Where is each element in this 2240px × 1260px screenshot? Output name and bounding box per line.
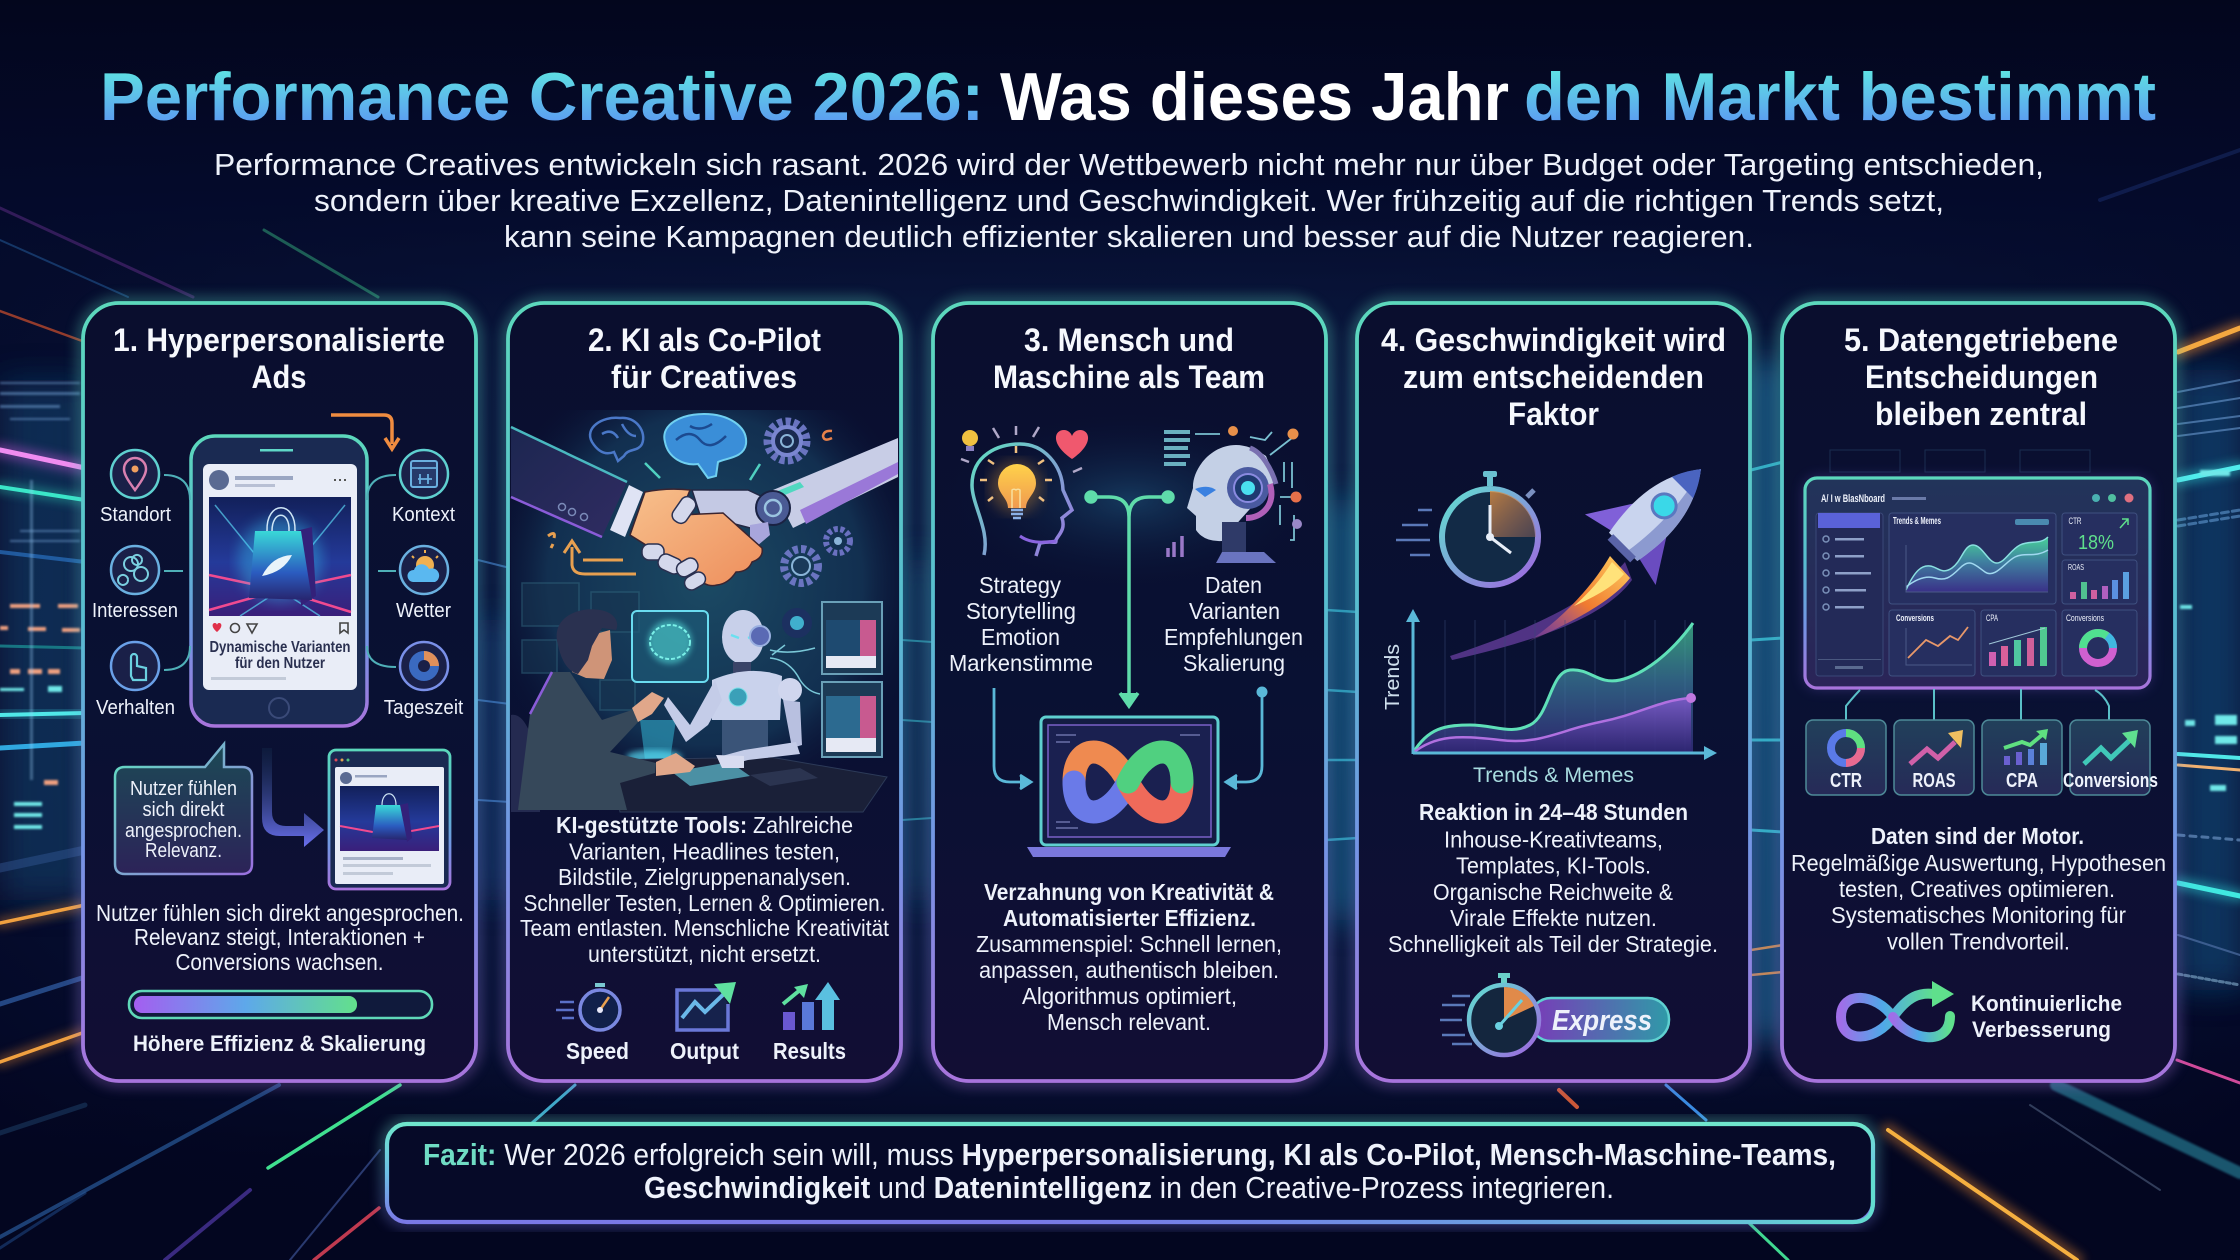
callout: fazit: Geschwindigkeit und Datenintelligenz in den Creative-Prozess integrieren. — [644, 1171, 1614, 1205]
panel: ki als co-pilot — [508, 303, 901, 1081]
list: human strengths — [949, 572, 1093, 676]
panel: geschwindigkeit — [1357, 303, 1750, 1081]
body text 3: Verzahnung von Kreativität & — [984, 879, 1274, 905]
metric: cpa: CPA — [2006, 770, 2038, 792]
body text 1: Relevanz steigt, Interaktionen + — [134, 924, 425, 950]
heading 5 — [1844, 322, 2118, 432]
speech bubble: sich direkt — [142, 799, 225, 821]
body text 4: Organische Reichweite & — [1433, 879, 1673, 905]
phone mockup: für den Nutzer — [235, 655, 325, 672]
speech bubble: angesprochen. — [125, 820, 242, 842]
heading 4 — [1381, 322, 1726, 432]
list: machine strengths: Skalierung — [1183, 650, 1285, 676]
icon: wetter — [400, 546, 448, 594]
dashboard: A/ I w BlasNboard — [1821, 493, 1885, 505]
donut tile: Conversions — [2066, 613, 2104, 624]
icon: tageszeit — [400, 642, 448, 690]
label: wetter: Wetter — [396, 600, 451, 622]
metric: roas: ROAS — [1912, 770, 1956, 792]
title: Was dieses Jahr — [1000, 59, 1509, 135]
main chart: Trends & Memes — [1893, 516, 1941, 527]
icon: suit arm — [511, 427, 643, 537]
heading 3: 3. Mensch und — [1024, 322, 1234, 358]
heading 5: 5. Datengetriebene — [1844, 322, 2118, 358]
icon: verhalten — [111, 642, 159, 690]
icon: human head with bulb — [961, 426, 1082, 556]
intro text — [214, 148, 2044, 254]
body text 3: Mensch relevant. — [1047, 1009, 1211, 1035]
label: tageszeit: Tageszeit — [384, 697, 464, 719]
icon: man — [511, 609, 695, 812]
heading 4: 4. Geschwindigkeit wird — [1381, 322, 1726, 358]
phone mockup: Dynamische Varianten — [210, 639, 350, 656]
label: output: Output — [670, 1038, 739, 1064]
body text 2: KI-gestützte Tools: Zahlreiche — [556, 812, 853, 838]
metric: conversions: Conversions — [2063, 770, 2158, 792]
icon: robot hand — [692, 490, 790, 552]
caption: verbesserung: Kontinuierliche — [1971, 991, 2122, 1016]
body text 5: Daten sind der Motor. — [1871, 823, 2084, 849]
panel: hyperpersonalisierte ads — [83, 303, 476, 1081]
icon: gears small — [784, 529, 850, 583]
speech bubble: Relevanz. — [145, 840, 222, 862]
speech bubble — [115, 744, 252, 874]
icon: rocket — [1450, 434, 1736, 660]
donut tile — [2062, 610, 2137, 676]
conversions tile — [1889, 610, 1975, 676]
body text 2: unterstützt, nicht ersetzt. — [588, 941, 821, 967]
icon: speed — [556, 983, 620, 1030]
body text 4: Inhouse-Kreativteams, — [1444, 826, 1663, 852]
body text 5: Regelmäßige Auswertung, Hypothesen — [1791, 850, 2166, 876]
metric: ctr — [1806, 720, 1886, 795]
icon: robot head — [1164, 426, 1302, 563]
icon: human hand — [630, 489, 762, 586]
body text 3: Automatisierter Effizienz. — [1003, 905, 1256, 931]
heading 1: 1. Hyperpersonalisierte — [113, 322, 445, 358]
metric: cpa — [1982, 720, 2062, 795]
icon: kontext — [400, 450, 448, 498]
icon: small bulb — [962, 430, 978, 451]
list: human strengths: Strategy — [979, 572, 1061, 598]
metric: conversions — [2063, 720, 2158, 795]
list: human strengths: Storytelling — [966, 598, 1076, 624]
connectors to metrics — [1846, 689, 2109, 720]
list: human strengths: Markenstimme — [949, 650, 1093, 676]
body text 3 — [976, 879, 1282, 1035]
roas tile — [2062, 560, 2137, 604]
caption: effizienz: Höhere Effizienz & Skalierung — [133, 1031, 426, 1056]
icon: generated ad screens — [770, 602, 882, 757]
list: machine strengths: Empfehlungen — [1164, 624, 1303, 650]
title: den Markt bestimmt — [1524, 59, 2156, 135]
small ad card — [329, 750, 450, 889]
illustration: handshake and team — [511, 410, 899, 815]
arrow: blue flow — [262, 748, 324, 847]
axis label: x: Trends & Memes — [1473, 764, 1634, 787]
heading 5: Entscheidungen — [1865, 359, 2098, 395]
label: standort: Standort — [100, 504, 171, 526]
axis label: y: Trends — [1382, 644, 1404, 710]
icon: outline brain — [590, 418, 643, 461]
label: kontext: Kontext — [392, 504, 455, 526]
icon: standort — [111, 450, 159, 498]
body text 4: Reaktion in 24–48 Stunden — [1419, 799, 1688, 825]
body text 2: Bildstile, Zielgruppenanalysen. — [558, 864, 851, 890]
icon: desk — [610, 757, 887, 812]
body text 3: Algorithmus optimiert, — [1022, 983, 1237, 1009]
metric: roas — [1894, 720, 1974, 795]
panel: datengetriebene entscheidungen — [1782, 303, 2175, 1081]
heading 4: Faktor — [1508, 396, 1599, 432]
icon: laptop with infinity — [1027, 717, 1231, 857]
list: human strengths: Emotion — [981, 624, 1060, 650]
icon: robot forearm — [773, 438, 898, 528]
panel: mensch und maschine — [933, 303, 1326, 1081]
heading 2: für Creatives — [611, 359, 797, 395]
icon: heart — [1056, 430, 1088, 459]
body text 2: Schneller Testen, Lernen & Optimieren. — [524, 890, 886, 916]
intro text: kann seine Kampagnen deutlich effizienter skalieren und besser auf die Nutzer reagieren. — [504, 220, 1754, 254]
list: machine strengths — [1164, 572, 1303, 676]
icon: interessen — [111, 546, 159, 594]
caption: verbesserung: Verbesserung — [1972, 1017, 2111, 1042]
arrow: orange up — [548, 533, 636, 574]
title: Performance Creative 2026: — [100, 59, 984, 135]
label: results: Results — [773, 1038, 846, 1064]
cpa tile: CPA — [1986, 613, 1998, 624]
body text 4 — [1388, 799, 1718, 957]
body text 2: Team entlasten. Menschliche Kreativität — [520, 915, 889, 941]
heading 3: Maschine als Team — [993, 359, 1265, 395]
intro text: sondern über kreative Exzellenz, Datenintelligenz und Geschwindigkeit. Wer frühzeitig auf die richtigen Trends setzt, — [314, 184, 1944, 218]
body text 5: vollen Trendvorteil. — [1887, 928, 2070, 954]
ctr tile — [2062, 513, 2137, 555]
arrows into laptop — [994, 686, 1268, 789]
icon: hologram — [632, 611, 708, 682]
callout: fazit: Fazit: Wer 2026 erfolgreich sein will, muss Hyperpersonalisierung, KI als Co-Pilot, Mensch-Maschine-Teams, — [423, 1138, 1836, 1172]
body text 2: Varianten, Headlines testen, — [569, 838, 840, 864]
heading 1 — [113, 322, 445, 395]
heading 5: bleiben zentral — [1875, 396, 2087, 432]
callout: fazit — [387, 1124, 1873, 1222]
heading 1: Ads — [252, 359, 306, 395]
body text 1: Nutzer fühlen sich direkt angesprochen. — [96, 900, 464, 926]
body text 3: Zusammenspiel: Schnell lernen, — [976, 931, 1282, 957]
arrow: orange top — [331, 415, 399, 449]
list: machine strengths: Daten — [1205, 572, 1262, 598]
label: speed: Speed — [566, 1038, 629, 1064]
body text 3: anpassen, authentisch bleiben. — [979, 957, 1279, 983]
caption: verbesserung — [1971, 991, 2122, 1042]
speech bubble: Nutzer fühlen — [130, 778, 237, 800]
connector: merge arrow — [1086, 492, 1173, 706]
chart: trends area — [1382, 609, 1717, 787]
icon: results — [783, 982, 840, 1030]
heading 2 — [588, 322, 821, 395]
icon: robot — [664, 610, 802, 768]
connector lines — [164, 475, 396, 670]
heading 4: zum entscheidenden — [1403, 359, 1704, 395]
body text 4: Templates, KI-Tools. — [1456, 852, 1651, 878]
body text 5: testen, Creatives optimieren. — [1839, 876, 2115, 902]
label: verhalten: Verhalten — [96, 697, 175, 719]
metric: ctr: CTR — [1830, 770, 1862, 792]
label: interessen: Interessen — [92, 600, 178, 622]
ctr tile: 18% — [2078, 532, 2114, 554]
main chart — [1889, 513, 2056, 604]
body text 1 — [96, 900, 464, 975]
badge: express — [1440, 973, 1669, 1055]
conversions tile: Conversions — [1896, 613, 1934, 624]
list: machine strengths: Varianten — [1189, 598, 1280, 624]
body text 4: Schnelligkeit als Teil der Strategie. — [1388, 931, 1718, 957]
icon: output — [677, 982, 736, 1030]
roas tile: ROAS — [2068, 562, 2084, 572]
phone mockup — [191, 436, 367, 726]
body text 1: Conversions wachsen. — [176, 949, 384, 975]
body text 2 — [520, 812, 889, 967]
sidebar — [1816, 513, 1883, 676]
heading 2: 2. KI als Co-Pilot — [588, 322, 821, 358]
heading 3 — [993, 322, 1265, 395]
cpa tile — [1981, 610, 2056, 676]
icon: infinity improvement — [1841, 981, 1954, 1037]
icon: robot thumb and fingers — [642, 494, 708, 593]
body text 4: Virale Effekte nutzen. — [1450, 905, 1657, 931]
ctr tile: CTR — [2068, 516, 2082, 527]
intro text: Performance Creatives entwickeln sich rasant. 2026 wird der Wettbewerb nicht mehr nur über Budget oder Targeting entschieden, — [214, 148, 2044, 182]
title — [100, 59, 2156, 135]
body text 5: Systematisches Monitoring für — [1831, 902, 2126, 928]
icon: filled brain — [664, 414, 746, 478]
icon: stopwatch — [1396, 471, 1538, 585]
progress bar — [129, 991, 432, 1018]
dashboard — [1805, 478, 2150, 688]
badge: express: Express — [1552, 1005, 1652, 1037]
icon: gear large — [768, 422, 806, 460]
body text 5 — [1791, 823, 2166, 954]
